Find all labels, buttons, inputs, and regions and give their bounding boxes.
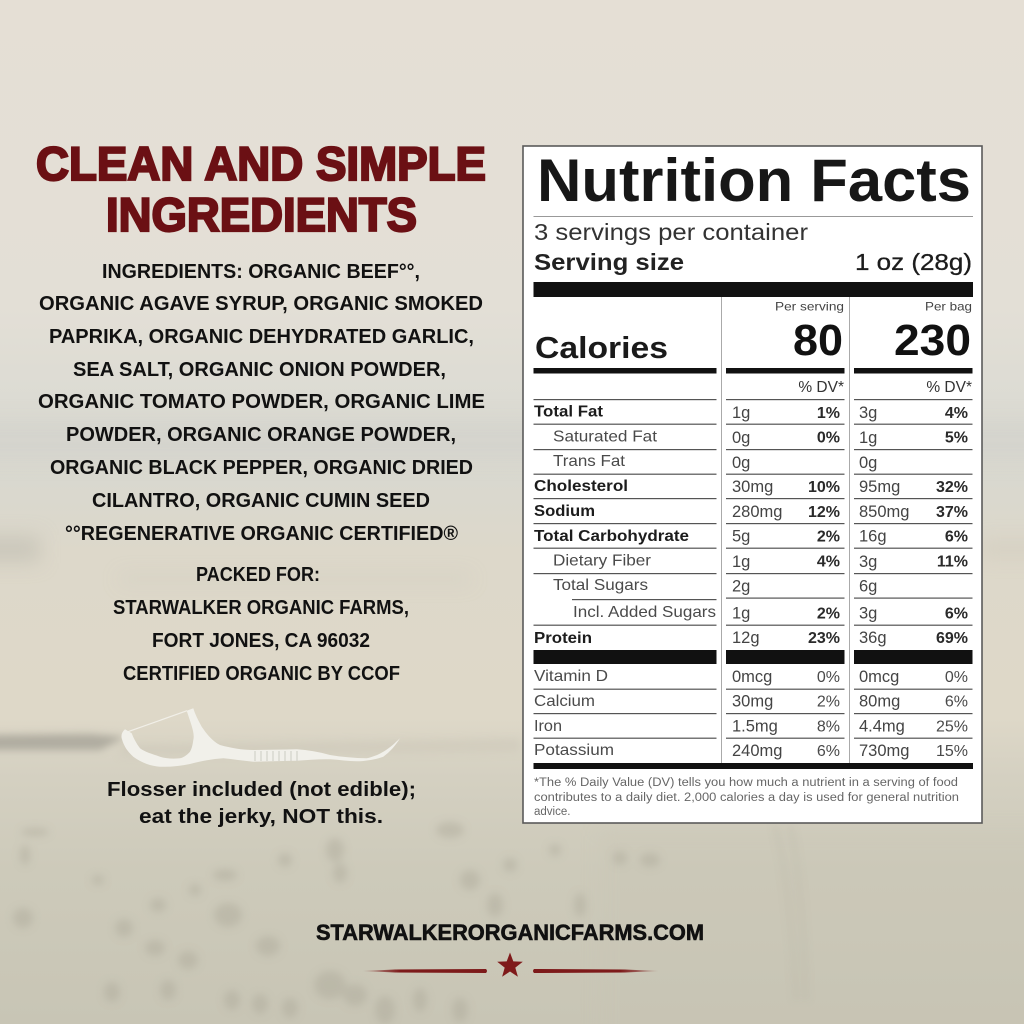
row: cholesterol: 10% bbox=[808, 479, 840, 496]
row: total carbohydrate: 5g bbox=[732, 528, 750, 546]
row: dietary fiber: Dietary Fiber bbox=[553, 552, 652, 570]
row: trans fat: 0g bbox=[859, 454, 877, 472]
row: cholesterol: 95mg bbox=[859, 478, 900, 496]
row: added sugars: 1g bbox=[732, 604, 750, 622]
footnote: daily value: *The % Daily Value (DV) tells you how much a nutrient in a serving of food bbox=[534, 777, 958, 789]
row: total sugars: 6g bbox=[859, 578, 877, 596]
row: dietary fiber: 3g bbox=[859, 553, 877, 571]
row: vitamin d: Vitamin D bbox=[534, 668, 608, 685]
servings information: Serving size bbox=[534, 249, 684, 275]
heading: clean and simple ingredients bbox=[36, 137, 486, 241]
servings information bbox=[534, 216, 973, 275]
row: calcium: 2% bbox=[817, 694, 840, 710]
row: total carbohydrate: Total Carbohydrate bbox=[534, 528, 689, 545]
calories section: Per serving bbox=[775, 300, 844, 314]
row: added sugars: Incl. Added Sugars bbox=[573, 604, 716, 621]
text block: ingredients list: ORGANIC TOMATO POWDER, ORGANIC LIME bbox=[38, 390, 485, 413]
row: total fat: Total Fat bbox=[534, 404, 604, 420]
row: total sugars bbox=[553, 577, 877, 596]
row: protein: Protein bbox=[534, 630, 592, 647]
text block: ingredients list: PAPRIKA, ORGANIC DEHYDRATED GARLIC, bbox=[49, 325, 474, 348]
row: saturated fat: Saturated Fat bbox=[553, 428, 658, 446]
row: dietary fiber: 1g bbox=[732, 553, 750, 571]
calories section: % DV* bbox=[926, 379, 972, 396]
text block: ingredients list: ORGANIC BLACK PEPPER, ORGANIC DRIED bbox=[50, 456, 473, 479]
calories section: 230 bbox=[894, 316, 971, 365]
row: cholesterol: 32% bbox=[936, 479, 968, 496]
row: iron: 25% bbox=[936, 718, 968, 736]
row: total carbohydrate: 16g bbox=[859, 528, 887, 546]
row: cholesterol: 30mg bbox=[732, 478, 773, 496]
row: sodium: 850mg bbox=[859, 503, 909, 521]
row: added sugars: 6% bbox=[945, 606, 968, 622]
row: protein: 23% bbox=[808, 630, 840, 647]
row: total carbohydrate: 6% bbox=[945, 528, 968, 546]
row: total fat: 4% bbox=[945, 405, 968, 422]
text block: ingredients list: SEA SALT, ORGANIC ONION POWDER, bbox=[73, 358, 446, 381]
row: trans fat: 0g bbox=[732, 454, 750, 472]
text block: packed for: PACKED FOR: bbox=[196, 563, 320, 586]
servings information: 3 servings per container bbox=[534, 219, 808, 245]
calories section: % DV* bbox=[798, 379, 844, 396]
icon: white dental flosser bbox=[121, 708, 400, 767]
row: total fat: 3g bbox=[859, 404, 877, 422]
row: saturated fat: 0g bbox=[732, 429, 750, 447]
calories section: 80 bbox=[793, 316, 843, 365]
row: saturated fat: 0% bbox=[817, 430, 840, 446]
row: potassium: 15% bbox=[936, 743, 968, 760]
row: added sugars: 2% bbox=[817, 606, 840, 622]
text block: packed for bbox=[113, 563, 409, 685]
row: potassium: 730mg bbox=[859, 742, 909, 760]
row: total fat: 1% bbox=[817, 405, 840, 422]
heading: clean and simple ingredients: CLEAN AND SIMPLE bbox=[36, 137, 486, 190]
row: vitamin d: 0mcg bbox=[859, 668, 899, 686]
row: potassium bbox=[534, 742, 968, 760]
caption: flosser note: eat the jerky, NOT this. bbox=[139, 806, 383, 828]
row: protein: 12g bbox=[732, 629, 760, 647]
heading: clean and simple ingredients: INGREDIENTS bbox=[106, 188, 417, 241]
footer ornament: star with lines bbox=[363, 952, 658, 977]
text block: ingredients list: INGREDIENTS: ORGANIC BEEF°°, bbox=[102, 260, 420, 283]
text block: ingredients list: CILANTRO, ORGANIC CUMIN SEED bbox=[92, 489, 430, 512]
footnote: daily value bbox=[534, 777, 959, 818]
row: sodium: 12% bbox=[808, 504, 840, 521]
row: iron: 1.5mg bbox=[732, 718, 778, 736]
row: protein bbox=[534, 629, 968, 647]
row: protein: 69% bbox=[936, 630, 968, 647]
footnote: daily value: contributes to a daily diet. 2,000 calories a day is used for general nutrition bbox=[534, 792, 959, 804]
text block: ingredients list: °°REGENERATIVE ORGANIC CERTIFIED® bbox=[65, 522, 458, 545]
text block: ingredients list: ORGANIC AGAVE SYRUP, ORGANIC SMOKED bbox=[39, 292, 483, 315]
row: calcium: 80mg bbox=[859, 692, 900, 710]
row: dietary fiber: 11% bbox=[937, 554, 968, 570]
row: calcium: 30mg bbox=[732, 692, 773, 710]
row: calcium: 6% bbox=[945, 694, 968, 710]
row: saturated fat: 1g bbox=[859, 429, 877, 447]
text block: packed for: STARWALKER ORGANIC FARMS, bbox=[113, 596, 409, 619]
row: iron bbox=[534, 718, 968, 736]
servings information: 1 oz (28g) bbox=[855, 249, 972, 275]
row: total carbohydrate: 2% bbox=[817, 528, 840, 546]
row: protein: 36g bbox=[859, 629, 887, 647]
row: iron: 8% bbox=[817, 718, 840, 736]
row: vitamin d: 0% bbox=[817, 669, 840, 686]
row: saturated fat: 5% bbox=[945, 430, 968, 446]
text block: packed for: CERTIFIED ORGANIC BY CCOF bbox=[123, 662, 400, 685]
row: dietary fiber: 4% bbox=[817, 554, 840, 570]
row: cholesterol: Cholesterol bbox=[534, 478, 628, 495]
row: vitamin d: 0% bbox=[945, 669, 968, 686]
website url: STARWALKERORGANICFARMS.COM bbox=[316, 920, 704, 945]
row: total sugars: 2g bbox=[732, 578, 750, 596]
row: cholesterol bbox=[534, 478, 968, 496]
row: sodium: 37% bbox=[936, 504, 968, 521]
row: sodium: 280mg bbox=[732, 503, 782, 521]
panel: nutrition facts label bbox=[523, 146, 982, 823]
heading: nutrition facts: Nutrition Facts bbox=[537, 147, 971, 214]
row: total sugars: Total Sugars bbox=[553, 577, 648, 594]
row: trans fat: Trans Fat bbox=[553, 453, 626, 470]
row: added sugars: 3g bbox=[859, 604, 877, 622]
row: vitamin d: 0mcg bbox=[732, 668, 772, 686]
calories section: Per bag bbox=[925, 300, 972, 314]
row: calcium: Calcium bbox=[534, 693, 595, 710]
row: total fat bbox=[534, 404, 968, 422]
row: sodium bbox=[534, 503, 968, 521]
row: potassium: 6% bbox=[817, 743, 840, 760]
row: vitamin d bbox=[534, 668, 968, 686]
text block: ingredients list bbox=[38, 260, 485, 545]
row: potassium: Potassium bbox=[534, 742, 614, 759]
row: added sugars bbox=[573, 604, 968, 622]
row: iron: 4.4mg bbox=[859, 718, 905, 736]
row: total carbohydrate bbox=[534, 528, 968, 546]
row: total fat: 1g bbox=[732, 404, 750, 422]
row: dietary fiber bbox=[553, 552, 968, 571]
caption: flosser note: Flosser included (not edible); bbox=[107, 779, 416, 801]
calories section: Calories bbox=[535, 330, 668, 365]
text block: ingredients list: POWDER, ORGANIC ORANGE POWDER, bbox=[66, 423, 456, 446]
text block: packed for: FORT JONES, CA 96032 bbox=[152, 629, 370, 652]
table rules and column bars bbox=[534, 282, 973, 769]
row: sodium: Sodium bbox=[534, 503, 595, 520]
row: calcium bbox=[534, 692, 968, 710]
row: saturated fat bbox=[553, 428, 968, 447]
row: iron: Iron bbox=[534, 718, 562, 735]
row: potassium: 240mg bbox=[732, 742, 782, 760]
calories section bbox=[535, 300, 972, 396]
caption: flosser note bbox=[107, 779, 416, 828]
row: trans fat bbox=[553, 453, 877, 472]
footnote: daily value: advice. bbox=[534, 806, 570, 818]
